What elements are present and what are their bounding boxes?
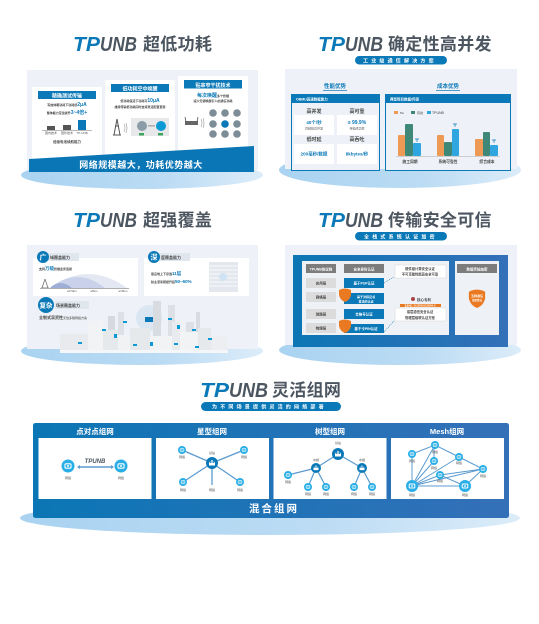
hybrid networking label: 混合组网 (249, 502, 299, 515)
cost bar chart panel: 综合成本 (479, 159, 495, 164)
authentication panel: 基于PUF认证 (354, 280, 375, 286)
point-to-point card: 网络 (65, 475, 71, 480)
authentication panel: 安全身份认证 (354, 266, 375, 272)
point-to-point card (38, 426, 152, 499)
cost bar chart panel (385, 94, 511, 170)
mesh card (391, 426, 504, 499)
encryption panel: 加密算法 (472, 298, 482, 302)
card: test: 国外技术 (61, 130, 73, 135)
mesh card: 网络 (431, 465, 437, 470)
deep coverage card (144, 251, 249, 296)
slogan band: 网络规模越大，功耗优势越大 (79, 159, 203, 170)
wide coverage card: 域覆盖能力 (50, 254, 70, 260)
base ellipse (21, 337, 263, 365)
authentication panel: 专利号: ZL202010132590.X (404, 304, 436, 308)
mesh card: 网络 (456, 460, 462, 465)
base ellipse (21, 161, 263, 189)
panel background (285, 245, 517, 345)
city illustration (60, 301, 228, 353)
title: UNB (345, 34, 383, 56)
card: test: 倍级电池续航能力 (53, 139, 81, 144)
base ellipse (279, 335, 521, 365)
performance panel: 200毫秒/数据 (301, 150, 328, 158)
authentication panel: 硬件级计算安全认证 (405, 266, 436, 271)
mesh card: Mesh组网 (430, 426, 464, 436)
encryption panel: 数据传输加密 (466, 266, 488, 272)
tree card: 网络 (351, 491, 357, 496)
star card: 网络 (209, 487, 215, 492)
authentication panel: 物理层 (316, 326, 327, 330)
authentication panel: 不可克隆性能高安全可靠 (402, 272, 439, 276)
performance panel: 8kbytes/秒 (346, 150, 369, 158)
performance advantage heading (323, 82, 347, 91)
title (200, 380, 341, 402)
authentication panel: 底层通信安全认证 (407, 309, 434, 314)
tree card (274, 426, 386, 499)
authentication panel: 算法的认证 (358, 298, 374, 304)
authentication panel: 物理层级联认证方案 (405, 315, 436, 320)
title: 超低功耗 (143, 35, 212, 54)
tree card: 中继 (359, 457, 365, 462)
tree card: 中继 (313, 457, 319, 462)
card: interference tech (178, 76, 248, 151)
performance panel: 高并发 (306, 108, 322, 115)
mesh card: 网络 (409, 458, 415, 463)
card: low power relay: 低功耗保活下功耗可10μA (120, 98, 160, 104)
base ellipse (279, 152, 521, 188)
point-to-point card: 点对点组网 (76, 426, 114, 436)
authentication panel (302, 261, 449, 335)
mesh card: 网络 (409, 492, 415, 497)
performance panel: 同频段高并发 (305, 126, 323, 130)
deep coverage card: 最高地上下穿透11层 (151, 271, 182, 277)
authentication panel: 应用层 (316, 280, 327, 286)
tree card: 网络 (285, 479, 291, 484)
title: TP (318, 210, 346, 232)
subtitle pill: 工业级通信解决方案 (363, 57, 437, 64)
card: test (32, 87, 102, 160)
section: super coverage (21, 210, 263, 365)
star card: 网络 (179, 454, 185, 459)
title: 传输安全可信 (388, 210, 492, 230)
title (73, 34, 212, 56)
card: test: 等效休眠功耗下功耗低2μA (47, 102, 87, 108)
section: ultra low power (21, 34, 263, 189)
cost bar chart panel: 有线 (417, 110, 423, 115)
title: UNB (229, 380, 268, 402)
blue container (33, 423, 509, 518)
star card (156, 426, 269, 499)
complex coverage heading: 复杂 (40, 300, 53, 310)
mesh card: 网络 (432, 449, 438, 454)
complex coverage heading (38, 297, 89, 320)
mesh card: 网络 (462, 492, 468, 497)
star card: 网络 (180, 487, 186, 492)
cost bar chart panel: 5G (400, 111, 405, 115)
tree card: 网络 (305, 491, 311, 496)
subtitle pill (355, 56, 447, 64)
deep coverage card: 度覆盖能力 (161, 254, 181, 260)
performance panel (291, 94, 380, 170)
section: deterministic high concurrency (279, 34, 521, 188)
card: test: TP-UNB (76, 131, 88, 135)
point-to-point card: TPUNB (85, 459, 106, 465)
title: TP (73, 34, 101, 56)
title: TP (73, 210, 101, 232)
tree card: 网络 (323, 491, 329, 496)
tree card: 网络 (369, 491, 375, 496)
star card: 基站 (209, 450, 215, 455)
wide coverage card: ≥0.5km (67, 289, 77, 293)
deep coverage card: 深 (150, 252, 158, 262)
section: secure and trusted (279, 210, 521, 365)
title: 灵活组网 (272, 381, 341, 400)
performance panel: ≥ 99.9% (348, 120, 367, 126)
authentication panel: 合格号认证 (355, 312, 373, 316)
blue container (293, 255, 508, 347)
complex coverage heading: 场景覆盖能力 (56, 302, 80, 308)
panel background (27, 70, 258, 170)
complex coverage heading: 全制式泉资性无缝多跳网络方案 (39, 314, 87, 320)
performance panel: 高吞吐 (349, 136, 365, 143)
subtitle pill (355, 232, 447, 240)
title: UNB (345, 210, 383, 232)
authentication panel: 核心专利 (417, 297, 431, 302)
card: interference tech: 减少无谓唤醒引入的通信功耗 (193, 98, 233, 103)
wide coverage card: 广 (40, 252, 46, 262)
tree card: 树型组网 (315, 426, 345, 436)
cost bar chart panel: 施工周期 (402, 159, 418, 164)
authentication panel: TPUNB协议栈 (310, 266, 333, 272)
point-to-point card: 网络 (118, 475, 124, 480)
title: 确定性高并发 (388, 34, 492, 54)
wide coverage card (33, 251, 138, 296)
performance panel: 低时延 (306, 136, 322, 143)
title: UNB (100, 34, 137, 56)
cost advantage heading (436, 82, 460, 91)
subtitle pill (201, 402, 341, 411)
card: low power relay: 维持传输低功耗同时支持灵活配置更新 (114, 104, 166, 109)
authentication panel: 基于对称证书 (357, 294, 375, 299)
authentication panel: 链路层 (316, 312, 327, 316)
star card: 网络 (241, 454, 247, 459)
title (73, 210, 212, 232)
cost advantage heading: 成本优势 (437, 82, 459, 90)
subtitle pill: 全栈式系统认证加密 (364, 233, 438, 240)
title: TP (318, 34, 346, 56)
wide coverage card: 支持万级终端业务连接 (39, 265, 72, 272)
mesh card: 网络 (437, 478, 443, 483)
deep coverage card: 较主流系统提升超50~60% (151, 279, 192, 284)
performance advantage heading: 性能优势 (324, 82, 346, 90)
card: test: 整体能力定量提升3~4倍+ (47, 109, 87, 116)
cost bar chart panel: 系统可靠性 (439, 159, 458, 164)
encryption panel (455, 261, 499, 335)
cost bar chart panel: TPUNB (432, 111, 445, 115)
section: flexible networking (20, 380, 520, 535)
tree card: 基站 (335, 440, 341, 445)
star card: 网络 (237, 487, 243, 492)
title (318, 34, 492, 56)
title: UNB (100, 210, 137, 232)
authentication panel: 网络层 (316, 294, 327, 300)
star card: 星型组网 (197, 426, 227, 436)
performance panel: 高可靠 (349, 108, 365, 115)
title: 超强覆盖 (143, 210, 212, 230)
title (318, 210, 492, 232)
performance panel: OBMU高速数据能力 (296, 96, 328, 102)
authentication panel: 基于卡PIN认证 (354, 326, 378, 331)
performance panel: 40个/秒 (306, 119, 322, 126)
card: low power relay (105, 80, 175, 155)
mesh card: 网络 (480, 473, 486, 478)
title: TP (200, 380, 230, 402)
performance panel: 传输成功率 (349, 126, 365, 130)
slogan band (29, 146, 254, 172)
card: interference tech: 每次唤醒多个终端 (197, 92, 229, 99)
card: test: 国内技术 (45, 130, 57, 135)
base ellipse (20, 501, 520, 535)
card: interference tech: 贴串窄干扰技术 (195, 82, 231, 89)
subtitle pill: 为不同场景提供灵活的网络部署 (212, 404, 327, 410)
wide coverage card: ≥5km (90, 289, 98, 293)
wide coverage card: ≥15km (119, 289, 128, 293)
encryption panel: 五种通信 (471, 293, 483, 298)
panel background (285, 69, 517, 169)
card: test: 精确测试传输 (52, 92, 82, 100)
cost bar chart panel: 典型项目数据/传感 (390, 96, 419, 102)
panel background (27, 245, 258, 349)
card: low power relay: 低功耗空中唤醒 (122, 86, 158, 92)
